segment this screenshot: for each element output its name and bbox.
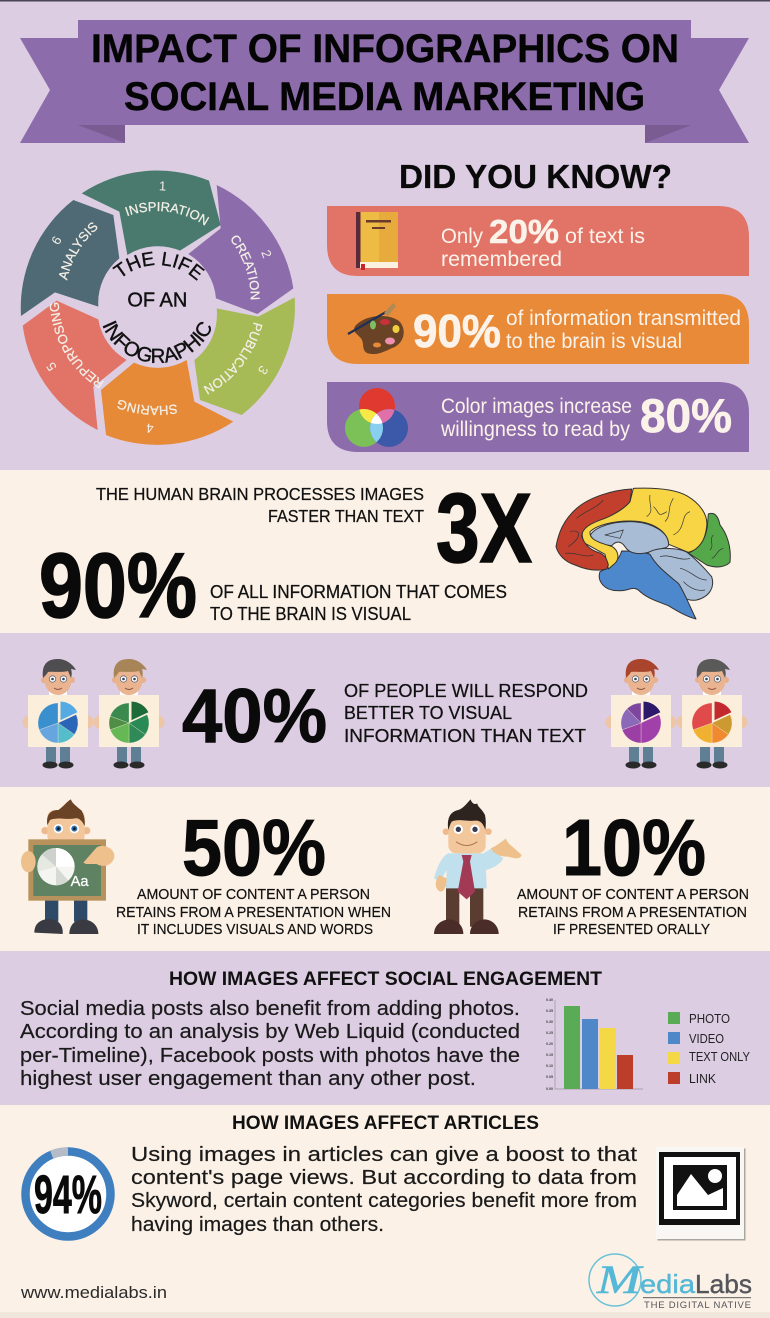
- donut: 94 percent: [26, 1151, 110, 1236]
- fact bar: 80 percent colour images: [327, 382, 749, 452]
- segment: creation: CREATION: [231, 236, 260, 300]
- paragraph: using images in articles: [131, 1143, 637, 1236]
- illustration: presenter in tie: [434, 799, 522, 934]
- fact bar: 20 percent of text: [327, 206, 749, 276]
- paragraph: social media posts: Social media posts also benefit from adding photos.: [20, 997, 520, 1020]
- panel: 40 percent visual response: [0, 633, 770, 787]
- chart legend: [668, 1012, 751, 1086]
- bar: link: [617, 1055, 633, 1089]
- text: people respond better: [344, 680, 588, 746]
- bar: text only: [600, 1028, 616, 1089]
- text: people respond better: OF PEOPLE WILL RESPOND: [344, 680, 588, 701]
- text: colour images increase: 80%: [640, 389, 732, 442]
- text: 10 percent description: [517, 887, 749, 938]
- text: all information visual: [210, 582, 507, 624]
- heading: did you know: DID YOU KNOW?: [399, 158, 672, 195]
- text: only 20 percent: remembered: [441, 248, 562, 271]
- bar: photo: [564, 1006, 580, 1089]
- icon: paint palette: [348, 303, 404, 354]
- chart legend: TEXT ONLY: [689, 1050, 751, 1064]
- illustration: man with purple pie chart: [606, 659, 676, 768]
- chart: life of an infographic wheel: [20, 170, 334, 445]
- segment: analysis: ANALYSIS: [59, 222, 98, 281]
- text: 90 percent of information: [413, 305, 741, 357]
- text: all information visual: TO THE BRAIN IS VISUAL: [210, 604, 411, 624]
- text: only 20 percent: 20%: [489, 213, 559, 250]
- stat: 3X: 3X: [436, 473, 532, 583]
- paragraph: social media posts: [20, 997, 520, 1090]
- segment: publication: [194, 297, 295, 415]
- text: brain processes images faster: FASTER THAN TEXT: [268, 506, 424, 526]
- paragraph: social media posts: According to an analysis by Web Liquid (conducted: [20, 1020, 520, 1043]
- icon: framed picture: [656, 1147, 746, 1240]
- segment: inspiration: INSPIRATION: [125, 202, 210, 226]
- text: 10 percent description: IF PRESENTED ORALLY: [553, 922, 710, 938]
- title line 1: IMPACT OF INFOGRAPHICS ON: [91, 27, 679, 71]
- bar chart: engagement by post type: 0.40: [546, 998, 553, 1002]
- text: 10 percent description: RETAINS FROM A PRESENTATION: [518, 905, 747, 921]
- stat: 40 percent: 40%: [182, 674, 327, 759]
- fact bar: 90 percent visual: [327, 294, 749, 364]
- segment: publication: PUBLICATION: [204, 322, 262, 395]
- segment: inspiration: 1: [159, 178, 167, 194]
- panel: social engagement: [0, 951, 770, 1105]
- logo: MediaLabs: [589, 1254, 752, 1311]
- panel: brain statistics: [0, 470, 770, 637]
- stat: 50 percent: 50%: [182, 803, 326, 892]
- text: colour images increase: willingness to read by: [440, 418, 630, 441]
- wheel centre title: OF AN: [127, 290, 187, 312]
- paragraph: using images in articles: having images than others.: [131, 1213, 384, 1236]
- illustration: man with blue pie chart: [22, 659, 94, 768]
- icon: colour circles: [345, 388, 408, 447]
- paragraph: using images in articles: Using images in articles can give a boost to that: [131, 1143, 637, 1166]
- bar chart: engagement by post type: 0.35: [546, 1009, 553, 1013]
- segment: sharing: SHARING: [117, 400, 177, 416]
- bar chart: engagement by post type: 0.05: [546, 1075, 553, 1079]
- text: only 20 percent: [441, 213, 645, 271]
- logo: MediaLabs: THE DIGITAL NATIVE: [644, 1300, 751, 1311]
- text: colour images increase: Color images increase: [441, 395, 632, 418]
- bar chart: engagement by post type: [546, 998, 643, 1091]
- icon: brain: [556, 488, 730, 619]
- paragraph: using images in articles: content's page views. But according to data from: [131, 1166, 637, 1189]
- donut: 94 percent: 94%: [34, 1165, 102, 1225]
- heading: articles: HOW IMAGES AFFECT ARTICLES: [232, 1113, 539, 1134]
- chart legend: VIDEO: [689, 1032, 724, 1046]
- title line 2: SOCIAL MEDIA MARKETING: [124, 75, 645, 119]
- text: colour images increase: [440, 389, 732, 442]
- panel: presentation retention: [0, 787, 770, 951]
- illustration: man with green pie chart: [94, 659, 164, 768]
- stat: 90 percent: 90%: [39, 535, 197, 637]
- text: only 20 percent: Only: [441, 225, 483, 248]
- bar chart: engagement by post type: 0.25: [546, 1031, 553, 1035]
- chart legend: PHOTO: [689, 1012, 730, 1026]
- logo: MediaLabs: edia: [640, 1269, 696, 1299]
- wheel centre title: THE LIFE: [112, 252, 205, 281]
- panel: articles and footer: [0, 1105, 770, 1318]
- segment: analysis: [20, 200, 120, 316]
- text: 50 percent description: [116, 887, 391, 938]
- icon: book: [356, 212, 398, 270]
- title banner: [20, 20, 749, 143]
- text: people respond better: INFORMATION THAN TEXT: [344, 725, 586, 746]
- text: 50 percent description: AMOUNT OF CONTENT A PERSON: [137, 887, 370, 903]
- text: 90 percent of information: to the brain is visual: [506, 330, 682, 353]
- illustration: teacher with chalkboard: [21, 799, 114, 934]
- text: brain processes images faster: THE HUMAN BRAIN PROCESSES IMAGES: [96, 484, 424, 504]
- segment: sharing: 4: [146, 421, 154, 436]
- illustration: man with red pie chart: [676, 659, 748, 768]
- bar chart: engagement by post type: 0.30: [546, 1020, 553, 1024]
- wheel centre title: [102, 252, 212, 364]
- text: 90 percent of information: of information transmitted: [506, 307, 741, 330]
- segment: sharing: [101, 360, 234, 445]
- chart legend: LINK: [689, 1072, 717, 1086]
- heading: social engagement: HOW IMAGES AFFECT SOCIAL ENGAGEMENT: [169, 969, 602, 990]
- text: 50 percent description: IT INCLUDES VISUALS AND WORDS: [137, 922, 373, 938]
- bar chart: engagement by post type: 0.20: [546, 1042, 553, 1046]
- text: people respond better: BETTER TO VISUAL: [344, 702, 512, 723]
- text: 90 percent of information: 90%: [413, 305, 501, 357]
- text: all information visual: OF ALL INFORMATION THAT COMES: [210, 582, 507, 602]
- paragraph: using images in articles: Skyword, certain content categories benefit more from: [131, 1189, 637, 1212]
- text: brain processes images faster: [96, 484, 424, 526]
- text: only 20 percent: of text is: [565, 225, 645, 248]
- segment: publication: 3: [255, 363, 271, 377]
- text: 50 percent description: RETAINS FROM A PRESENTATION WHEN: [116, 905, 391, 921]
- label: Aa on board: Aa: [71, 874, 89, 890]
- bar chart: engagement by post type: 0.15: [546, 1053, 553, 1057]
- bar chart: engagement by post type: 0.10: [546, 1064, 553, 1068]
- text: 10 percent description: AMOUNT OF CONTENT A PERSON: [517, 887, 749, 903]
- bar chart: engagement by post type: 0.00: [546, 1087, 553, 1091]
- paragraph: social media posts: highest user engagement than any other post.: [20, 1067, 476, 1090]
- segment: analysis: 6: [48, 234, 65, 247]
- paragraph: social media posts: per-Timeline), Facebook posts with photos have the: [20, 1044, 520, 1067]
- logo: MediaLabs: M: [596, 1257, 645, 1302]
- segment: creation: [188, 185, 294, 314]
- logo: MediaLabs: Labs: [695, 1269, 752, 1299]
- stat: 10 percent: 10%: [562, 803, 706, 892]
- segment: repurposing: REPURPOSING: [50, 302, 104, 388]
- panel: header background: [0, 0, 770, 470]
- segment: repurposing: [22, 300, 126, 430]
- wheel centre title: INFOGRAPHIC: [102, 320, 212, 364]
- bar: video: [582, 1019, 598, 1089]
- segment: creation: 2: [258, 248, 275, 260]
- segment: inspiration: [82, 170, 220, 255]
- segment: repurposing: 5: [43, 360, 60, 374]
- footer url: www.medialabs.in: [20, 1283, 167, 1302]
